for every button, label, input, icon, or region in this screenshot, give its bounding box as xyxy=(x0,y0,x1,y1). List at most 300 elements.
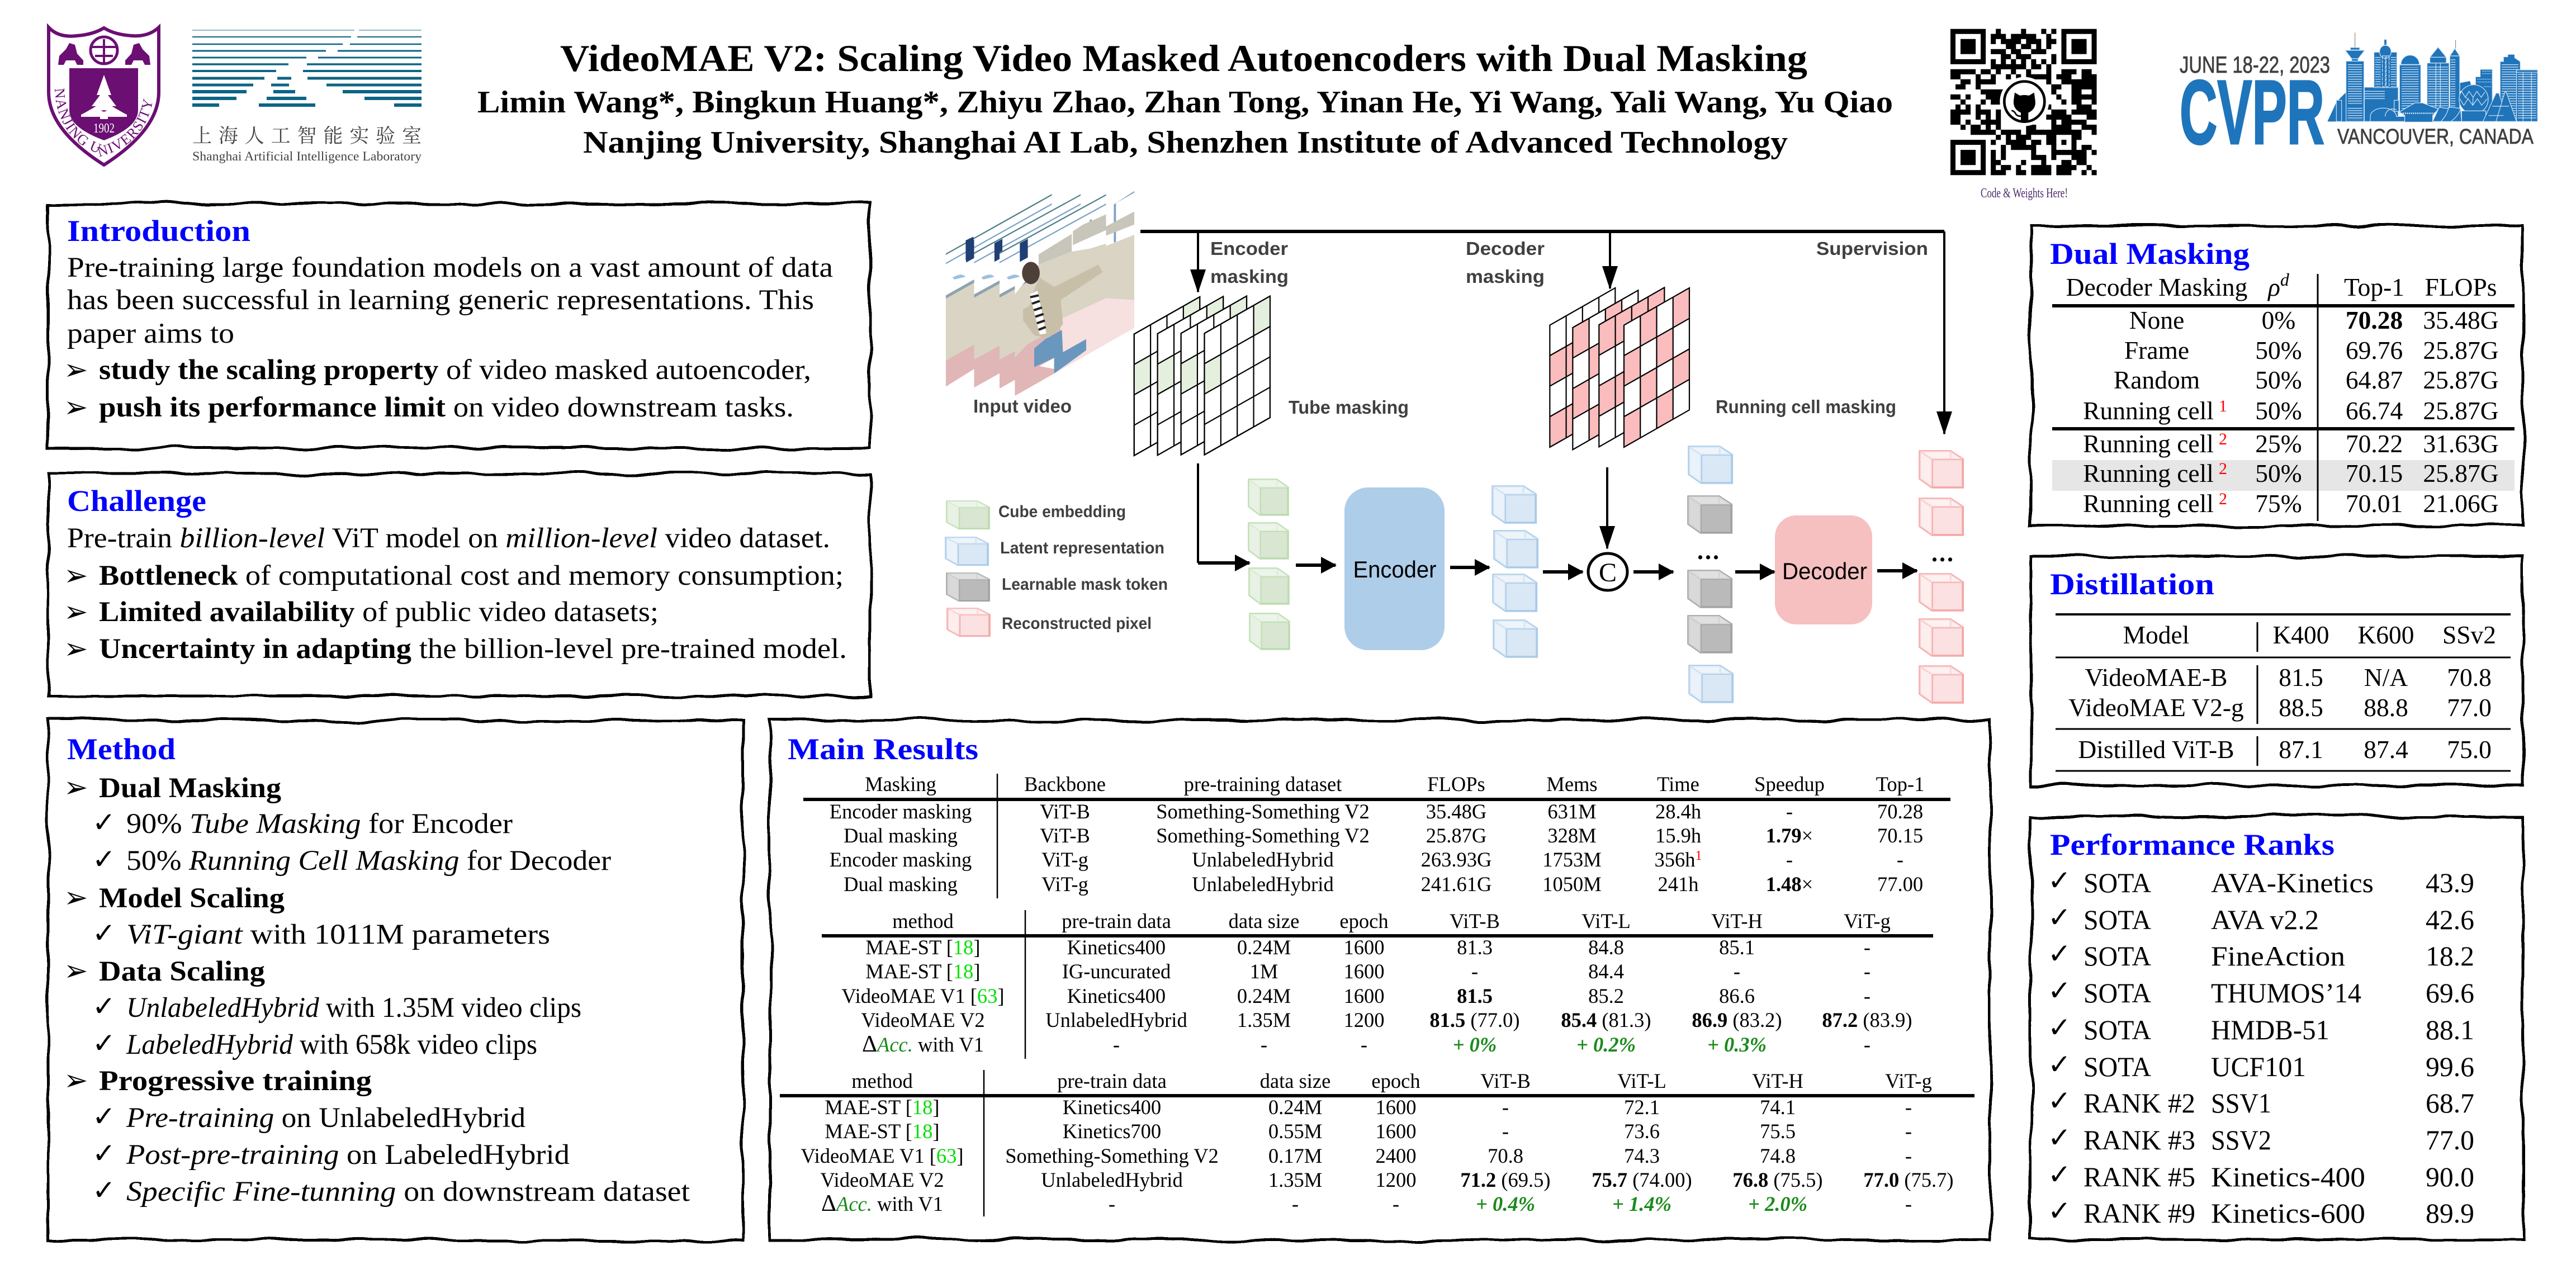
table: Something-Something V2 results: Something-Something V2 xyxy=(1005,1144,1219,1167)
panel: Introduction xyxy=(48,203,870,448)
figure: input video frames xyxy=(946,191,1134,396)
table: Kinetics-400 results: VideoMAE V1 [63] xyxy=(841,984,1005,1007)
table: Something-Something V2 results xyxy=(780,1069,1974,1216)
table: training efficiency: 35.48G xyxy=(1426,800,1486,823)
table: decoder masking: 21.06G xyxy=(2423,489,2499,518)
concat symbol: C xyxy=(1599,558,1617,588)
box: Decoder: Decoder xyxy=(1782,558,1867,584)
box: Encoder: Encoder xyxy=(1353,556,1437,583)
table: training efficiency: Something-Something V2 xyxy=(1156,824,1370,847)
table: Something-Something V2 results: - xyxy=(1502,1120,1509,1143)
label: Running cell masking: Running cell masking xyxy=(1716,396,1896,417)
challenge text: Limited availability of public video datasets; xyxy=(99,596,659,628)
heading: Main Results: Main Results xyxy=(788,732,978,766)
table: Kinetics-400 results: ViT-B xyxy=(1450,910,1500,932)
table: decoder masking: 75% xyxy=(2255,489,2302,518)
table: Kinetics-400 results: 85.4 (81.3) xyxy=(1561,1008,1651,1031)
table: training efficiency: Dual masking xyxy=(844,873,958,896)
table: distillation: K600 xyxy=(2357,621,2414,649)
table: Something-Something V2 results: ViT-H xyxy=(1752,1069,1803,1092)
table: Something-Something V2 results: epoch xyxy=(1371,1069,1420,1092)
challenge text xyxy=(64,523,847,666)
list: ranks: SOTA xyxy=(2083,904,2151,935)
challenge text: Pre-train billion-level ViT model on million-level video dataset. xyxy=(67,523,830,554)
table: decoder masking: 25.87G xyxy=(2423,396,2499,425)
logo: Shanghai AI Laboratory: Shanghai Artificial Intelligence Laboratory xyxy=(192,149,422,163)
table: Something-Something V2 results: 1600 xyxy=(1375,1120,1417,1143)
table: Kinetics-400 results: pre-train data xyxy=(1062,910,1171,932)
list: ranks: SSV1 xyxy=(2211,1087,2271,1119)
table: decoder masking: 25.87G xyxy=(2423,336,2499,364)
table: Kinetics-400 results: - xyxy=(1864,984,1871,1007)
logo: CVPR 2023 Vancouver: CVPR xyxy=(2180,61,2324,163)
label: Encoder masking: masking xyxy=(1210,266,1289,287)
list: ranks: RANK #3 xyxy=(2083,1124,2195,1156)
table: Kinetics-400 results: 84.8 xyxy=(1588,936,1624,959)
table: distillation: Distilled ViT-B xyxy=(2078,735,2234,764)
method list: 90% Tube Masking for Encoder xyxy=(126,808,513,840)
challenge text: ➢ xyxy=(64,632,88,666)
table: Something-Something V2 results: VideoMAE V1 [63] xyxy=(801,1144,964,1167)
table: training efficiency: Top-1 xyxy=(1876,773,1924,795)
table: training efficiency: ViT-B xyxy=(1040,824,1090,847)
legend: Learnable mask token xyxy=(1002,575,1168,594)
table: training efficiency: Backbone xyxy=(1024,773,1106,795)
legend: Cube embedding xyxy=(998,503,1126,521)
list: ranks: RANK #9 xyxy=(2083,1197,2195,1229)
list: ranks: 68.7 xyxy=(2426,1087,2474,1119)
intro text xyxy=(64,252,833,424)
label: Encoder masking: Encoder xyxy=(1210,238,1288,259)
table: Kinetics-400 results: method xyxy=(892,910,954,932)
figure: tube masking grids xyxy=(1134,296,1270,456)
table: training efficiency: 631M xyxy=(1547,800,1597,823)
figure: reconstructed cubes: ... xyxy=(1931,539,1955,567)
table: training efficiency: 28.4h xyxy=(1655,800,1701,823)
logo: Nanjing University: 1902 xyxy=(93,121,115,136)
table: training efficiency: ViT-B xyxy=(1040,800,1090,823)
table: Kinetics-400 results: - xyxy=(1471,960,1478,983)
method list: Post-pre-training on LabeledHybrid xyxy=(126,1139,570,1171)
table: Something-Something V2 results: + 0.4% xyxy=(1476,1192,1535,1215)
method list: Pre-training on UnlabeledHybrid xyxy=(126,1102,525,1134)
table: decoder masking: 70.15 xyxy=(2346,459,2403,487)
table: Something-Something V2 results: + 1.4% xyxy=(1612,1192,1671,1215)
QR code xyxy=(1950,29,2097,175)
list: ranks: Kinetics-400 xyxy=(2211,1161,2365,1192)
table: Kinetics-400 results: 1M xyxy=(1250,960,1278,983)
intro text: push its performance limit on video downstream tasks. xyxy=(99,392,794,423)
table: training efficiency: - xyxy=(1897,848,1903,871)
table: Kinetics-400 results: 1600 xyxy=(1344,984,1384,1007)
table: Kinetics-400 results: + 0.2% xyxy=(1576,1033,1636,1056)
method list: ✓ xyxy=(92,843,116,875)
table: decoder masking: Running cell xyxy=(2083,429,2214,458)
table: training efficiency: ViT-g xyxy=(1041,848,1088,871)
table: decoder masking: Running cell xyxy=(2083,489,2214,518)
table: distillation: K400 xyxy=(2272,621,2329,649)
table: decoder masking: 66.74 xyxy=(2346,396,2403,425)
table: distillation xyxy=(2056,614,2511,771)
logo: CVPR 2023 Vancouver: VANCOUVER, CANADA xyxy=(2337,125,2534,149)
table: training efficiency: 356h xyxy=(1655,848,1695,871)
logo: Shanghai AI Laboratory xyxy=(192,30,422,163)
intro text: Pre-training large foundation models on a vast amount of data xyxy=(67,252,833,283)
table: Kinetics-400 results: 0.24M xyxy=(1237,984,1291,1007)
table: Something-Something V2 results: - xyxy=(1905,1096,1912,1119)
label: Encoder masking xyxy=(1210,238,1289,287)
table: Kinetics-400 results: 1200 xyxy=(1344,1008,1384,1031)
panel: Challenge xyxy=(48,473,870,696)
list: ranks: SOTA xyxy=(2083,940,2151,972)
table: decoder masking: Top-1 xyxy=(2344,273,2404,301)
table: distillation: 87.1 xyxy=(2279,735,2323,764)
table: Kinetics-400 results: - xyxy=(1261,1033,1267,1056)
table: Something-Something V2 results: VideoMAE V2 xyxy=(820,1168,944,1191)
label: Decoder masking xyxy=(1466,238,1545,287)
table: Something-Something V2 results: 1.35M xyxy=(1268,1168,1322,1191)
table: Kinetics-400 results xyxy=(822,910,1933,1059)
table: training efficiency: 1753M xyxy=(1542,848,1602,871)
table: Something-Something V2 results: 74.8 xyxy=(1760,1144,1796,1167)
table: Kinetics-400 results: - xyxy=(1734,960,1740,983)
list: ranks: HMDB-51 xyxy=(2211,1014,2329,1045)
table: decoder masking: 69.76 xyxy=(2346,336,2403,364)
table: decoder masking: FLOPs xyxy=(2425,273,2497,301)
logo: Nanjing University: NANJING UNIVERSITY xyxy=(55,88,152,157)
list: ranks: UCF101 xyxy=(2211,1051,2306,1082)
list: ranks: THUMOS’14 xyxy=(2211,977,2361,1008)
table: Something-Something V2 results: 77.0 (75.7) xyxy=(1863,1168,1954,1191)
method list: ➢ xyxy=(64,771,88,804)
table: training efficiency: Time xyxy=(1657,773,1699,795)
table: training efficiency: ViT-g xyxy=(1041,873,1088,896)
list: ranks: RANK #2 xyxy=(2083,1087,2195,1119)
table: decoder masking: ρ xyxy=(2268,273,2280,301)
table: training efficiency: 1050M xyxy=(1542,873,1602,896)
table: decoder masking: 70.22 xyxy=(2346,429,2403,458)
table: Kinetics-400 results: 86.6 xyxy=(1719,984,1755,1007)
list: ranks xyxy=(2048,864,2474,1229)
table: Something-Something V2 results: - xyxy=(1109,1192,1115,1215)
table: decoder masking: 50% xyxy=(2255,459,2302,487)
list: ranks: 18.2 xyxy=(2426,940,2474,972)
table: decoder masking: 25.87G xyxy=(2423,459,2499,487)
table: training efficiency: 70.15 xyxy=(1877,824,1923,847)
figure: latent cubes xyxy=(1493,486,1537,657)
method list: Model Scaling xyxy=(99,883,285,914)
table: Kinetics-400 results: 81.5 xyxy=(1457,984,1493,1007)
table: decoder masking: 50% xyxy=(2255,336,2302,364)
heading: Dual Masking: Dual Masking xyxy=(2050,237,2250,271)
list: ranks: SOTA xyxy=(2083,1051,2151,1082)
table: Kinetics-400 results: 81.3 xyxy=(1457,936,1493,959)
table: training efficiency: 15.9h xyxy=(1655,824,1701,847)
legend xyxy=(946,501,1168,636)
method list: ➢ xyxy=(64,881,88,915)
table: distillation: 77.0 xyxy=(2447,693,2492,722)
panel: Main Results xyxy=(770,720,1990,1240)
list: ranks: ✓ xyxy=(2048,1121,2071,1154)
table: Something-Something V2 results: MAE-ST [18] xyxy=(825,1096,940,1119)
table: decoder masking: 0% xyxy=(2262,306,2295,334)
table: Something-Something V2 results: 73.6 xyxy=(1624,1120,1660,1143)
list: ranks: 42.6 xyxy=(2426,904,2474,935)
method list xyxy=(64,771,690,1208)
figure: cube embeddings xyxy=(1249,480,1289,649)
table: Something-Something V2 results: - xyxy=(1905,1120,1912,1143)
table: Something-Something V2 results: Kinetics400 xyxy=(1063,1096,1161,1119)
method list: UnlabeledHybrid with 1.35M video clips xyxy=(126,992,581,1024)
method list: ✓ xyxy=(92,1027,116,1059)
list: ranks: SOTA xyxy=(2083,977,2151,1008)
intro text: paper aims to xyxy=(67,318,234,349)
challenge text: ➢ xyxy=(64,595,88,629)
list: ranks: 69.6 xyxy=(2426,977,2474,1008)
QR caption: Code & Weights Here! xyxy=(1981,186,2068,201)
panel: Distillation xyxy=(2031,556,2523,785)
list: ranks: ✓ xyxy=(2048,1085,2071,1117)
list: ranks: AVA-Kinetics xyxy=(2211,867,2374,898)
heading: Performance Ranks: Performance Ranks xyxy=(2050,828,2334,861)
table: training efficiency: 263.93G xyxy=(1421,848,1491,871)
table: Kinetics-400 results: + 0.3% xyxy=(1707,1033,1767,1056)
table: Something-Something V2 results: - xyxy=(1393,1192,1399,1215)
table: decoder masking: Frame xyxy=(2124,336,2189,364)
table: Something-Something V2 results: ViT-L xyxy=(1617,1069,1666,1092)
table: decoder masking: 2 xyxy=(2219,460,2227,478)
challenge text: Bottleneck of computational cost and memory consumption; xyxy=(99,560,844,591)
table: Something-Something V2 results: - xyxy=(1905,1192,1912,1215)
table: training efficiency: Encoder masking xyxy=(830,800,972,823)
box: Encoder xyxy=(1344,487,1445,650)
table: Kinetics-400 results: 1600 xyxy=(1344,936,1384,959)
table: Kinetics-400 results: ViT-H xyxy=(1711,910,1763,932)
table: distillation: SSv2 xyxy=(2442,621,2496,649)
table: Kinetics-400 results: data size xyxy=(1229,910,1299,932)
table: decoder masking: d xyxy=(2280,269,2290,290)
table: Something-Something V2 results: + 2.0% xyxy=(1748,1192,1807,1215)
table: training efficiency: 328M xyxy=(1547,824,1597,847)
figure: tokens column xyxy=(1688,447,1732,702)
logo: CVPR 2023 Vancouver: JUNE 18-22, 2023 xyxy=(2180,51,2330,78)
table: Something-Something V2 results: 2400 xyxy=(1375,1144,1417,1167)
table: Kinetics-400 results: 84.4 xyxy=(1588,960,1624,983)
figure: running cell masking grids xyxy=(1550,287,1689,449)
table: decoder masking: 50% xyxy=(2255,396,2302,425)
list: ranks: ✓ xyxy=(2048,1011,2071,1044)
table: training efficiency: Masking xyxy=(865,773,936,795)
table: decoder masking: Running cell xyxy=(2083,396,2214,425)
table: Something-Something V2 results: - xyxy=(1905,1144,1912,1167)
table: training efficiency: 241.61G xyxy=(1421,873,1491,896)
list: ranks: RANK #5 xyxy=(2083,1161,2195,1192)
table: decoder masking: 64.87 xyxy=(2346,366,2403,394)
table: distillation: 87.4 xyxy=(2364,735,2408,764)
table: distillation: 88.8 xyxy=(2364,693,2408,722)
method list: ➢ xyxy=(64,954,88,988)
table: Something-Something V2 results: 75.5 xyxy=(1760,1120,1796,1143)
label: Supervision: Supervision xyxy=(1816,238,1928,259)
table: training efficiency: 1.48× xyxy=(1766,873,1813,896)
table: Kinetics-400 results: 87.2 (83.9) xyxy=(1822,1008,1912,1031)
list: ranks: ✓ xyxy=(2048,937,2071,970)
table: training efficiency: 70.28 xyxy=(1877,800,1923,823)
table: Kinetics-400 results: 85.2 xyxy=(1588,984,1624,1007)
table: decoder masking: 31.63G xyxy=(2423,429,2499,458)
table: Kinetics-400 results: epoch xyxy=(1339,910,1389,932)
table: Kinetics-400 results: - xyxy=(1113,1033,1120,1056)
table: Kinetics-400 results: UnlabeledHybrid xyxy=(1045,1008,1187,1031)
method list: ➢ xyxy=(64,1064,88,1097)
table: training efficiency xyxy=(803,773,1950,898)
table: distillation: 75.0 xyxy=(2447,735,2492,764)
challenge text: ➢ xyxy=(64,559,88,593)
table: Kinetics-400 results: MAE-ST [18] xyxy=(865,936,981,959)
table: training efficiency: 77.00 xyxy=(1877,873,1923,896)
method list: 50% Running Cell Masking for Decoder xyxy=(126,845,611,877)
table: Something-Something V2 results: 76.8 (75.5) xyxy=(1732,1168,1823,1191)
table: decoder masking: 50% xyxy=(2255,366,2302,394)
method list: ✓ xyxy=(92,806,116,839)
figure: tokens column: ... xyxy=(1697,537,1721,565)
table: training efficiency: - xyxy=(1786,848,1793,871)
table: Something-Something V2 results: 71.2 (69.5) xyxy=(1460,1168,1551,1191)
table: Kinetics-400 results: MAE-ST [18] xyxy=(865,960,981,983)
method list: Progressive training xyxy=(99,1066,372,1097)
concat symbol xyxy=(1588,553,1627,590)
table: Kinetics-400 results: VideoMAE V2 xyxy=(861,1008,985,1031)
table: Something-Something V2 results: 70.8 xyxy=(1488,1144,1523,1167)
list: ranks: ✓ xyxy=(2048,1158,2071,1191)
table: distillation: 70.8 xyxy=(2447,663,2492,692)
list: ranks: 90.0 xyxy=(2426,1161,2474,1192)
table: training efficiency: Dual masking xyxy=(844,824,958,847)
table: Something-Something V2 results: 75.7 (74.00) xyxy=(1592,1168,1692,1191)
table: Something-Something V2 results: MAE-ST [18] xyxy=(825,1120,940,1143)
table: distillation: VideoMAE-B xyxy=(2085,663,2228,692)
figure: reconstructed cubes xyxy=(1920,451,1963,703)
table: Kinetics-400 results: IG-uncurated xyxy=(1062,960,1171,983)
label: Tube masking: Tube masking xyxy=(1289,397,1409,418)
table: decoder masking: 25.87G xyxy=(2423,366,2499,394)
table: decoder masking: Running cell xyxy=(2083,459,2214,487)
table: Something-Something V2 results: ViT-g xyxy=(1885,1069,1932,1092)
table: Kinetics-400 results: 0.24M xyxy=(1237,936,1291,959)
table: Something-Something V2 results: 74.1 xyxy=(1760,1096,1796,1119)
table: distillation: 81.5 xyxy=(2279,663,2323,692)
table: Kinetics-400 results: ViT-g xyxy=(1844,910,1891,932)
table: distillation: 88.5 xyxy=(2279,693,2323,722)
table: Kinetics-400 results: ΔAcc. with V1 xyxy=(862,1031,984,1057)
table: training efficiency: 25.87G xyxy=(1426,824,1486,847)
table: Something-Something V2 results: pre-train data xyxy=(1057,1069,1167,1092)
panel: Performance Ranks xyxy=(2031,816,2523,1239)
table: Kinetics-400 results: - xyxy=(1864,1033,1871,1056)
table: Kinetics-400 results: ViT-L xyxy=(1581,910,1631,932)
table: decoder masking: 2 xyxy=(2219,430,2227,448)
heading: Distillation: Distillation xyxy=(2050,567,2214,601)
table: Kinetics-400 results: - xyxy=(1361,1033,1367,1056)
table: training efficiency: pre-training dataset xyxy=(1184,773,1342,795)
table: Kinetics-400 results: 85.1 xyxy=(1719,936,1755,959)
table: Something-Something V2 results: 74.3 xyxy=(1624,1144,1660,1167)
table: distillation: Model xyxy=(2123,621,2189,649)
table: Kinetics-400 results: + 0% xyxy=(1453,1033,1497,1056)
legend: Reconstructed pixel xyxy=(1002,614,1152,633)
table: Kinetics-400 results: - xyxy=(1864,960,1871,983)
table: training efficiency: Mems xyxy=(1546,773,1598,795)
logo: CVPR 2023 Vancouver xyxy=(2180,32,2537,163)
label: Decoder masking: Decoder xyxy=(1466,238,1545,259)
table: Something-Something V2 results: ΔAcc. with V1 xyxy=(821,1191,943,1216)
panel: Dual Masking xyxy=(2031,226,2523,526)
intro text: ➢ xyxy=(64,391,88,424)
authors: Limin Wang*, Bingkun Huang*, Zhiyu Zhao, Zhan Tong, Yinan He, Yi Wang, Yali Wang, Yu Qiao xyxy=(477,85,1893,120)
table: training efficiency: 1 xyxy=(1695,849,1702,863)
table: training efficiency: Encoder masking xyxy=(830,848,972,871)
table: Something-Something V2 results: - xyxy=(1292,1192,1299,1215)
table: training efficiency: Something-Something V2 xyxy=(1156,800,1370,823)
table: training efficiency: UnlabeledHybrid xyxy=(1192,848,1334,871)
table: decoder masking: Random xyxy=(2114,366,2200,394)
table: decoder masking: 25% xyxy=(2255,429,2302,458)
table: decoder masking: 2 xyxy=(2219,490,2227,508)
list: ranks: ✓ xyxy=(2048,974,2071,1007)
table: Something-Something V2 results: 0.17M xyxy=(1268,1144,1322,1167)
figure: pipeline arrows xyxy=(1198,463,1917,572)
table: Something-Something V2 results: 1200 xyxy=(1375,1168,1417,1191)
label: Decoder masking: masking xyxy=(1466,266,1545,287)
method list: LabeledHybrid with 658k video clips xyxy=(126,1029,537,1060)
table: distillation: VideoMAE V2-g xyxy=(2068,693,2244,722)
list: ranks: ✓ xyxy=(2048,901,2071,934)
table: decoder masking: Decoder Masking xyxy=(2066,273,2247,301)
table: training efficiency: 1.79× xyxy=(1766,824,1813,847)
table: Something-Something V2 results: 0.24M xyxy=(1268,1096,1322,1119)
table: Something-Something V2 results: ViT-B xyxy=(1480,1069,1531,1092)
table: Something-Something V2 results: method xyxy=(851,1069,913,1092)
table: Something-Something V2 results: 1600 xyxy=(1375,1096,1417,1119)
list: ranks: SSV2 xyxy=(2211,1124,2271,1156)
figure: supervision line and masking arrows xyxy=(1140,231,1944,434)
table: training efficiency: - xyxy=(1786,800,1793,823)
method list: ViT-giant with 1011M parameters xyxy=(126,919,550,950)
table: Something-Something V2 results: 0.55M xyxy=(1268,1120,1322,1143)
method list: ✓ xyxy=(92,917,116,949)
list: ranks: 88.1 xyxy=(2426,1014,2474,1045)
logo: Nanjing University xyxy=(47,23,160,167)
table: training efficiency: 241h xyxy=(1658,873,1698,896)
intro text: ➢ xyxy=(64,353,88,387)
method list: ✓ xyxy=(92,1137,116,1169)
method list: ✓ xyxy=(92,1100,116,1133)
method list: ✓ xyxy=(92,1174,116,1206)
intro text: study the scaling property of video masked autoencoder, xyxy=(99,354,811,386)
table: training efficiency: FLOPs xyxy=(1427,773,1485,795)
table: decoder masking: 35.48G xyxy=(2423,306,2499,334)
table: Something-Something V2 results: - xyxy=(1502,1096,1509,1119)
list: ranks: SOTA xyxy=(2083,1014,2151,1045)
heading: Challenge: Challenge xyxy=(67,484,206,518)
table: training efficiency: Speedup xyxy=(1754,773,1825,795)
list: ranks: SOTA xyxy=(2083,867,2151,898)
list: ranks: ✓ xyxy=(2048,1048,2071,1081)
label: Input video: Input video xyxy=(973,396,1072,416)
table: Kinetics-400 results: 1.35M xyxy=(1237,1008,1291,1031)
table: Kinetics-400 results: 81.5 (77.0) xyxy=(1429,1008,1520,1031)
affiliations: Nanjing University, Shanghai AI Lab, Shenzhen Institute of Advanced Technology xyxy=(583,125,1788,160)
